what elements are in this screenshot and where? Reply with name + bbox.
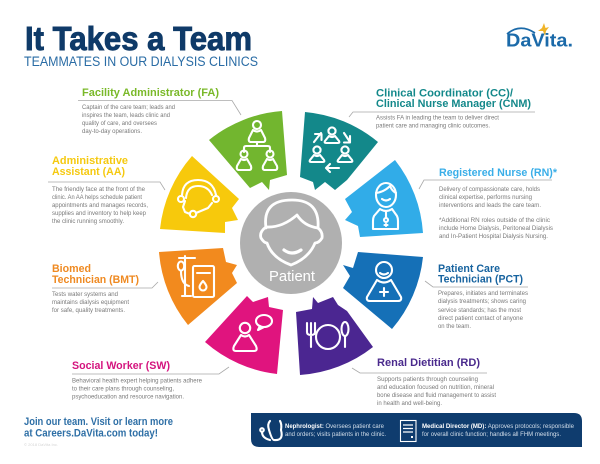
- icon: dialysis machine and IV: [178, 256, 214, 297]
- heading: Patient Care: [438, 263, 500, 275]
- heading: Social Worker (SW): [72, 360, 170, 372]
- description: maintains dialysis equipment: [52, 299, 129, 306]
- nephrologist text: Nephrologist: Oversees patient care: [285, 423, 384, 430]
- description: appointments and manages records,: [52, 202, 148, 209]
- description: [438, 290, 528, 330]
- heading: Clinical Coordinator (CC)/: [376, 88, 514, 100]
- description: include Home Dialysis, Peritoneal Dialysis: [439, 225, 553, 232]
- description: [72, 378, 202, 400]
- description: Captain of the care team; leads and: [82, 104, 175, 111]
- description: and education focused on nutrition, mineral: [377, 384, 494, 391]
- wedge: [205, 296, 283, 374]
- panel: Clinical Coordinator: [300, 88, 535, 190]
- leader line: [419, 180, 552, 189]
- nephrologist text: and orders; visits patients in the clinic.: [285, 431, 386, 438]
- heading: Technician (PCT): [438, 274, 523, 286]
- icon: headset: [178, 180, 219, 217]
- leader line: [349, 112, 535, 117]
- subtitle: TEAMMATES IN OUR DIALYSIS CLINICS: [24, 54, 258, 69]
- wedge: [296, 297, 373, 375]
- description: clinical expertise, performs nursing: [439, 194, 532, 201]
- wedge: [345, 160, 423, 237]
- patient circle: [240, 192, 342, 294]
- leader line: [52, 282, 158, 288]
- circle: [240, 192, 342, 294]
- panel: Administrative Assistant: [48, 155, 239, 233]
- leader line: [425, 281, 528, 287]
- icon: person with speech bubble: [233, 315, 272, 351]
- title: It Takes a Team: [25, 20, 252, 57]
- heading: Administrative: [52, 155, 128, 167]
- medical director text: [422, 423, 574, 438]
- icon: hierarchy of people: [237, 121, 277, 170]
- description: to their care plans through counseling,: [72, 386, 174, 392]
- description: direct patient contact of anyone: [438, 315, 523, 322]
- panel: Renal Dietitian: [296, 297, 496, 407]
- label: Patient: [269, 268, 316, 285]
- leader line: [72, 367, 229, 374]
- heading: [52, 155, 128, 178]
- heading: Renal Dietitian (RD): [377, 357, 480, 369]
- copyright: © 2018 DaVita Inc.: [24, 443, 58, 447]
- panel: physicians: [251, 413, 582, 447]
- description: Behavioral health expert helping patients adhere: [72, 378, 202, 384]
- heading: Clinical Nurse Manager (CNM): [376, 98, 531, 110]
- description: [52, 186, 148, 225]
- call to action: Join our team. Visit or learn more: [24, 416, 173, 428]
- description: quality of care, and oversees: [82, 120, 157, 127]
- heading: [376, 88, 531, 110]
- icon: technician: [367, 262, 401, 301]
- panel: Biomed Technician: [52, 248, 237, 325]
- heading: Facility Administrator (FA): [82, 87, 219, 99]
- call to action: at Careers.DaVita.com today!: [24, 428, 158, 440]
- medical director text: Medical Director (MD): Approves protocols; responsible: [422, 423, 574, 430]
- leader line: [352, 368, 487, 373]
- description: patient care and managing clinic outcomes.: [376, 122, 490, 130]
- description: Tests water systems and: [52, 291, 118, 298]
- description: for safe, quality treatments.: [52, 307, 125, 314]
- description: [377, 376, 496, 407]
- description: supplies and inventory to help keep: [52, 210, 146, 217]
- nephrologist text: [285, 423, 386, 438]
- description: the clinic running smoothly.: [52, 218, 124, 225]
- icon: document: [400, 420, 416, 442]
- description: day-to-day operations.: [82, 128, 142, 135]
- wedge: [160, 156, 239, 233]
- logo: DaVita: DaVita.: [506, 30, 573, 50]
- wedge: [343, 252, 423, 329]
- description: Delivery of compassionate care, holds: [439, 186, 540, 193]
- description: Supports patients through counseling: [377, 376, 478, 383]
- wedge: [300, 112, 378, 190]
- panel background: [251, 413, 582, 447]
- wedge: [159, 248, 237, 325]
- call to action: [24, 416, 173, 440]
- description: bone disease and fluid management to assist: [377, 392, 496, 399]
- description: [439, 186, 553, 240]
- panel: Patient Care Technician: [343, 252, 528, 330]
- description: dialysis treatments; shows caring: [438, 298, 526, 305]
- description: in health and well-being.: [377, 400, 442, 407]
- description: inspires the team, leads clinic and: [82, 112, 170, 119]
- leader line: [78, 100, 241, 115]
- panel: Facility Administrator: [78, 87, 287, 190]
- description: The friendly face at the front of the: [52, 186, 145, 193]
- description: clinic. An AA helps schedule patient: [52, 194, 142, 201]
- description: on the team.: [438, 323, 471, 330]
- description: *Additional RN roles outside of the clinic: [439, 217, 551, 224]
- heading: Technician (BMT): [52, 274, 139, 286]
- heading: Assistant (AA): [52, 166, 125, 178]
- description: [376, 114, 499, 130]
- medical director text: for overall clinic function; handles all FHM meetings.: [422, 431, 561, 438]
- icon: stethoscope: [260, 421, 282, 440]
- heading: Biomed: [52, 263, 91, 275]
- icon: rotating team: [310, 127, 352, 172]
- heading: [438, 263, 523, 286]
- description: service standards; has the most: [438, 307, 521, 314]
- icon: nurse: [373, 183, 398, 229]
- description: psychoeducation and resource navigation.: [72, 394, 184, 400]
- heading: [52, 263, 139, 286]
- description: [52, 291, 129, 314]
- icon: patient face: [261, 200, 322, 265]
- panel: Social Worker: [72, 296, 283, 400]
- description: and In-Patient Hospital Dialysis Nursing.: [439, 233, 548, 240]
- wedge: [209, 111, 287, 190]
- icon: plate and cutlery: [307, 322, 348, 349]
- leader line: [48, 182, 165, 190]
- description: [82, 104, 175, 135]
- description: interventions and leads the care team.: [439, 202, 541, 209]
- heading: Registered Nurse (RN)*: [439, 167, 558, 179]
- description: Prepares, initiates and terminates: [438, 290, 528, 297]
- description: Assists FA in leading the team to deliver direct: [376, 114, 499, 122]
- panel: Registered Nurse: [345, 160, 558, 240]
